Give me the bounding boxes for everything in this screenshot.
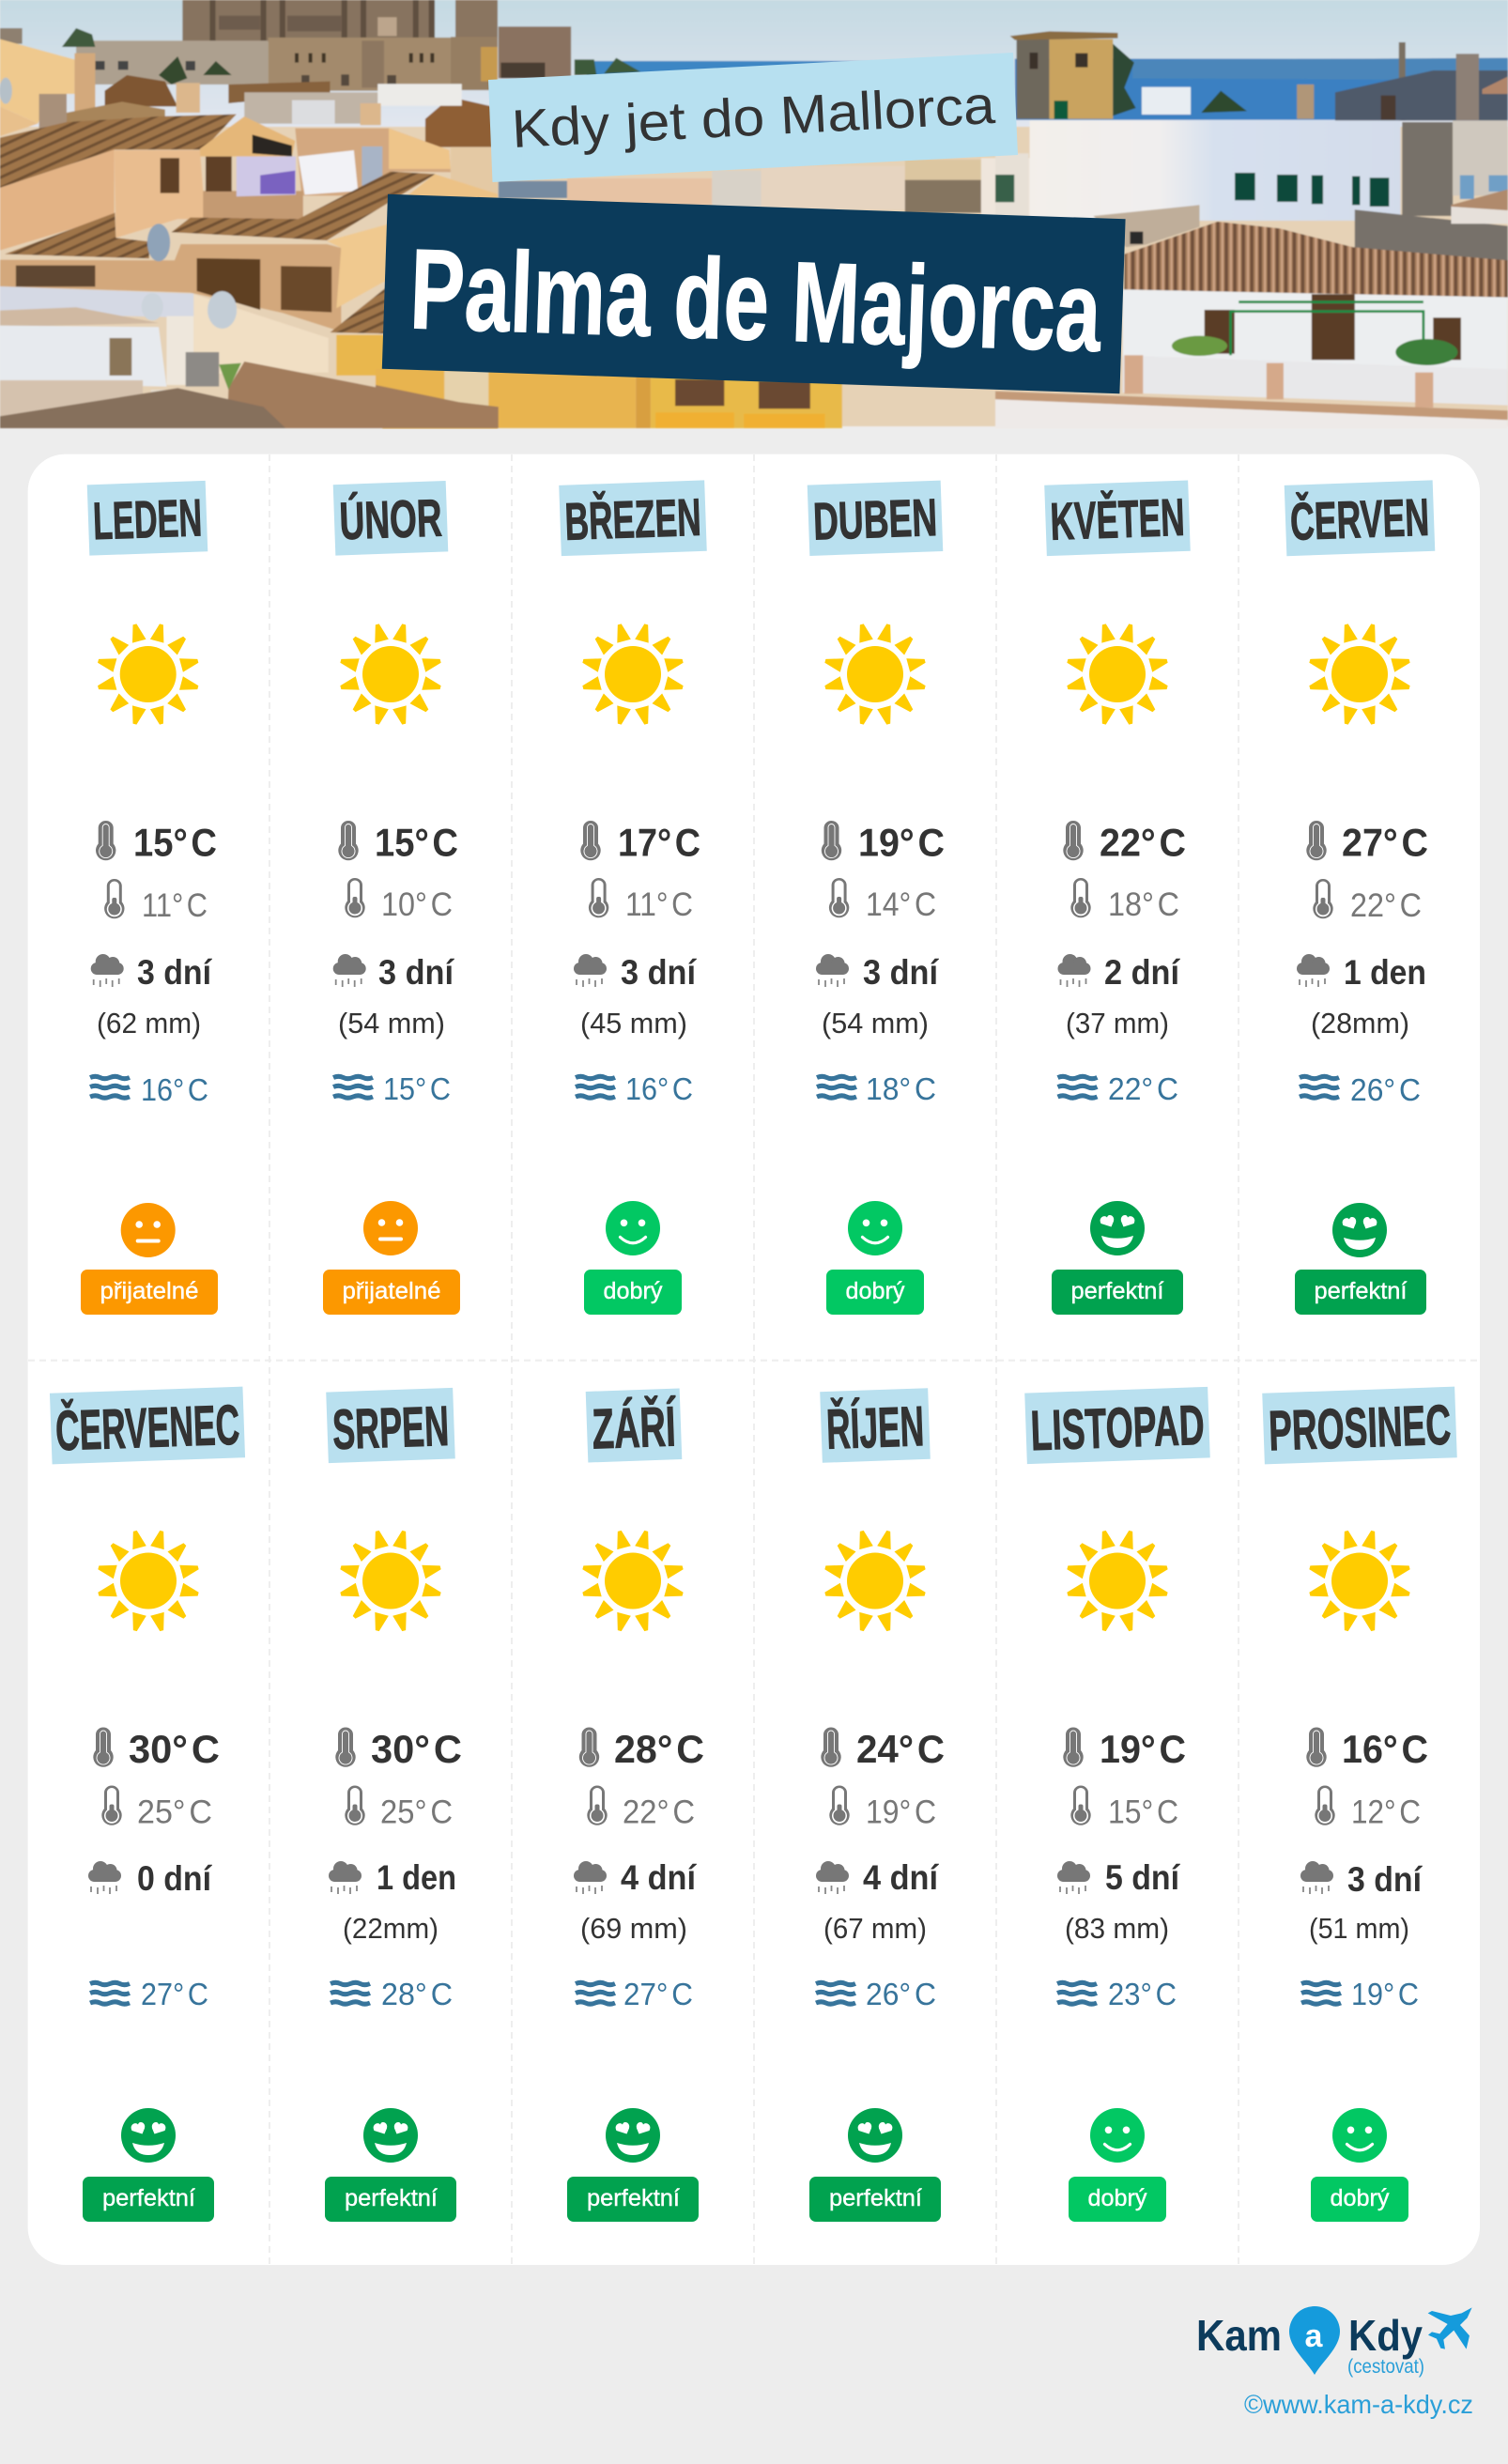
rating pill	[584, 1270, 682, 1315]
low temperature: 22°C	[623, 1794, 695, 1831]
icon: sun	[1066, 1529, 1169, 1633]
sea temperature: 27°C	[623, 1977, 693, 2011]
low temperature	[1070, 1786, 1178, 1831]
month label: KVĚTEN	[1049, 487, 1186, 551]
rating face	[848, 1201, 902, 1255]
icon: sun	[1308, 1529, 1411, 1633]
rainy days: 3 dní	[378, 953, 455, 992]
sea temperature	[1057, 1071, 1178, 1106]
month: ÚNOR	[323, 481, 460, 1315]
icon: airplane	[1428, 2307, 1472, 2349]
high temperature	[96, 821, 217, 865]
sea temperature: 26°C	[1350, 1072, 1421, 1107]
month: DUBEN	[808, 481, 945, 1315]
rating pill: přijatelné	[342, 1278, 441, 1304]
rating pill	[826, 1270, 924, 1315]
month label: LEDEN	[92, 487, 203, 550]
icon: sun	[339, 623, 442, 726]
high temperature: 28°C	[614, 1727, 704, 1771]
rating pill	[81, 1270, 218, 1315]
month label	[1024, 1387, 1210, 1464]
month label: ČERVENEC	[54, 1394, 240, 1462]
sea temperature	[90, 1977, 208, 2011]
low temperature	[1315, 1786, 1421, 1831]
low temperature	[1070, 878, 1179, 923]
subtitle banner: Kdy jet do Mallorca	[510, 75, 996, 160]
rainy days: 5 dní	[1105, 1858, 1181, 1897]
rating pill: perfektní	[1315, 1278, 1408, 1304]
month: ZÁŘÍ	[567, 1388, 704, 2222]
rating pill	[809, 2177, 941, 2222]
sea temperature	[331, 1977, 453, 2011]
rainy days	[816, 953, 940, 992]
header photo: Palma rooftops	[0, 0, 1508, 429]
high temperature: 17°C	[618, 821, 700, 865]
icon: sun	[581, 1529, 685, 1633]
high temperature	[1063, 1727, 1186, 1771]
rainy days: 4 dní	[621, 1858, 698, 1897]
rating pill: dobrý	[845, 1278, 905, 1304]
low temperature	[345, 878, 453, 923]
rainy days	[1057, 953, 1181, 992]
rainy days: 3 dní	[621, 953, 698, 992]
rainy days: 3 dní	[863, 953, 940, 992]
month label	[586, 1388, 682, 1463]
high temperature: 15°C	[375, 821, 458, 865]
sea temperature	[816, 1977, 936, 2011]
precipitation: (45 mm)	[580, 1007, 687, 1040]
low temperature	[345, 1786, 453, 1831]
low temperature	[587, 1786, 695, 1831]
precipitation: (62 mm)	[97, 1007, 201, 1040]
rating pill	[1052, 1270, 1183, 1315]
low temperature: 15°C	[1108, 1794, 1178, 1831]
rating pill: dobrý	[603, 1278, 663, 1304]
high temperature: 30°C	[371, 1727, 462, 1771]
icon: sun	[97, 623, 200, 726]
rating pill: perfektní	[1070, 1278, 1164, 1304]
rating face	[1090, 1201, 1145, 1255]
month label: SRPEN	[331, 1394, 450, 1461]
logo: Kam a Kdy: Kdy	[1348, 2311, 1423, 2360]
rating pill	[323, 1270, 460, 1315]
precipitation: (83 mm)	[1065, 1912, 1169, 1945]
rainy days: 3 dní	[1347, 1860, 1423, 1899]
icon: map pin	[1289, 2306, 1340, 2375]
month label	[820, 1388, 931, 1463]
high temperature	[822, 821, 945, 865]
sea temperature	[817, 1071, 936, 1106]
high temperature: 30°C	[129, 1727, 220, 1771]
rating pill: přijatelné	[100, 1278, 199, 1304]
rainy days: 1 den	[1344, 953, 1426, 992]
rainy days	[1300, 1860, 1423, 1899]
high temperature: 24°C	[856, 1727, 945, 1771]
icon: sun	[1308, 623, 1411, 726]
month label	[87, 481, 208, 556]
sea temperature: 15°C	[383, 1071, 451, 1106]
icon: sun	[823, 1529, 927, 1633]
rainy days	[574, 953, 698, 992]
sea temperature: 26°C	[866, 1977, 936, 2011]
rating pill	[83, 2177, 214, 2222]
high temperature	[1063, 821, 1186, 865]
precipitation: (54 mm)	[822, 1007, 929, 1040]
panel: monthly calendar	[28, 454, 1480, 2265]
sea temperature: 27°C	[141, 1977, 208, 2011]
icon: sun	[581, 623, 685, 726]
sea temperature	[1300, 1072, 1421, 1107]
low temperature	[101, 1786, 212, 1831]
rating face	[121, 2108, 176, 2163]
month: ČERVENEC	[50, 1387, 245, 2222]
rating pill	[1069, 2177, 1166, 2222]
rating face	[363, 2108, 418, 2163]
rating face	[121, 1203, 176, 1257]
month label	[50, 1387, 245, 1464]
low temperature: 11°C	[625, 886, 693, 923]
rating pill	[567, 2177, 699, 2222]
sea temperature	[90, 1072, 208, 1107]
rainy days	[88, 1859, 213, 1898]
rating pill: perfektní	[102, 2185, 195, 2211]
month label: BŘEZEN	[563, 487, 702, 551]
month label	[559, 480, 707, 556]
month: BŘEZEN	[559, 480, 707, 1315]
month label: ŘÍJEN	[825, 1394, 925, 1461]
precipitation: (51 mm)	[1309, 1912, 1409, 1945]
month label: ZÁŘÍ	[591, 1394, 678, 1461]
rating face	[1332, 1203, 1387, 1257]
rainy days: 0 dní	[137, 1859, 213, 1898]
sea temperature: 18°C	[866, 1071, 936, 1106]
low temperature	[1313, 879, 1422, 924]
low temperature: 19°C	[866, 1794, 936, 1831]
rainy days: 4 dní	[863, 1858, 940, 1897]
rating face	[606, 2108, 660, 2163]
month label	[326, 1388, 455, 1463]
logo: Kam a Kdy: (cestovat)	[1347, 2356, 1424, 2378]
month label: ÚNOR	[338, 487, 443, 550]
low temperature: 25°C	[380, 1794, 453, 1831]
high temperature	[1306, 1727, 1428, 1771]
subtitle banner	[488, 53, 1018, 182]
rainy days: 1 den	[377, 1858, 456, 1897]
rating pill: perfektní	[587, 2185, 680, 2211]
high temperature: 19°C	[1100, 1727, 1186, 1771]
month: PROSINEC	[1262, 1387, 1457, 2222]
sea temperature	[576, 1071, 693, 1106]
rating pill: dobrý	[1330, 2185, 1390, 2211]
rating pill	[1295, 1270, 1426, 1315]
month label: LISTOPAD	[1029, 1394, 1206, 1462]
title banner: Palma de Majorca	[408, 224, 1104, 376]
sea temperature: 19°C	[1351, 1977, 1419, 2011]
low temperature	[589, 878, 693, 923]
logo: Kam a Kdy: Kam	[1196, 2311, 1282, 2360]
rating face	[1332, 2108, 1387, 2163]
rating pill	[325, 2177, 456, 2222]
low temperature: 11°C	[142, 887, 208, 924]
low temperature: 22°C	[1350, 887, 1422, 924]
low temperature: 25°C	[137, 1794, 212, 1831]
low temperature: 18°C	[1108, 886, 1179, 923]
month: LEDEN	[81, 481, 218, 1315]
rainy days: 3 dní	[137, 953, 213, 992]
month label: ČERVEN	[1289, 487, 1430, 551]
rainy days: 2 dní	[1104, 953, 1181, 992]
month: KVĚTEN	[1044, 480, 1191, 1315]
high temperature: 16°C	[1342, 1727, 1428, 1771]
sea temperature: 28°C	[381, 1977, 453, 2011]
sea temperature: 16°C	[141, 1072, 208, 1107]
month label	[808, 481, 943, 556]
high temperature: 19°C	[858, 821, 945, 865]
rainy days	[1057, 1858, 1181, 1897]
rainy days	[1297, 953, 1426, 992]
precipitation: (69 mm)	[580, 1912, 687, 1945]
precipitation: (67 mm)	[823, 1912, 927, 1945]
low temperature: 10°C	[381, 886, 453, 923]
rating face	[606, 1201, 660, 1255]
month label	[333, 481, 448, 556]
website credit: ©www.kam-a-kdy.cz	[1244, 2390, 1473, 2419]
sea temperature	[333, 1071, 451, 1106]
precipitation: (37 mm)	[1066, 1007, 1169, 1040]
sea temperature	[1301, 1977, 1419, 2011]
precipitation: (22mm)	[343, 1912, 439, 1945]
rating pill: perfektní	[345, 2185, 438, 2211]
precipitation: (54 mm)	[338, 1007, 445, 1040]
month: ČERVEN	[1285, 480, 1435, 1315]
rainy days	[91, 953, 213, 992]
month: ŘÍJEN	[809, 1388, 945, 2222]
icon: sun	[1066, 623, 1169, 726]
high temperature	[580, 821, 700, 865]
sea temperature: 22°C	[1108, 1071, 1178, 1106]
sea temperature	[1057, 1977, 1177, 2011]
title banner	[382, 194, 1126, 393]
month label	[1285, 480, 1435, 556]
low temperature: 12°C	[1351, 1794, 1421, 1831]
rainy days	[329, 1858, 456, 1897]
icon: sun	[97, 1529, 200, 1633]
sea temperature	[576, 1977, 693, 2011]
icon: sun	[823, 623, 927, 726]
rating face	[1090, 2108, 1145, 2163]
icon: sun	[339, 1529, 442, 1633]
rating pill: dobrý	[1087, 2185, 1147, 2211]
precipitation: (28mm)	[1311, 1007, 1409, 1040]
rainy days	[816, 1858, 940, 1897]
month: SRPEN	[325, 1388, 462, 2222]
high temperature	[1306, 821, 1428, 865]
high temperature: 22°C	[1100, 821, 1186, 865]
low temperature	[829, 1786, 936, 1831]
low temperature	[104, 879, 208, 924]
high temperature: 15°C	[133, 821, 217, 865]
low temperature	[829, 878, 936, 923]
sea temperature: 16°C	[625, 1071, 693, 1106]
rating pill: perfektní	[829, 2185, 922, 2211]
rating face	[363, 1201, 418, 1255]
rating pill	[1311, 2177, 1408, 2222]
rainy days	[574, 1858, 698, 1897]
month label	[1044, 480, 1191, 556]
high temperature	[338, 821, 458, 865]
rating face	[848, 2108, 902, 2163]
month label: DUBEN	[812, 487, 938, 551]
high temperature: 27°C	[1342, 821, 1428, 865]
sea temperature: 23°C	[1108, 1977, 1177, 2011]
low temperature: 14°C	[866, 886, 936, 923]
icon: map pin: a	[1305, 2318, 1324, 2354]
month: LISTOPAD	[1024, 1387, 1210, 2222]
rainy days	[333, 953, 455, 992]
logo: Kam a Kdy	[1196, 2306, 1472, 2378]
